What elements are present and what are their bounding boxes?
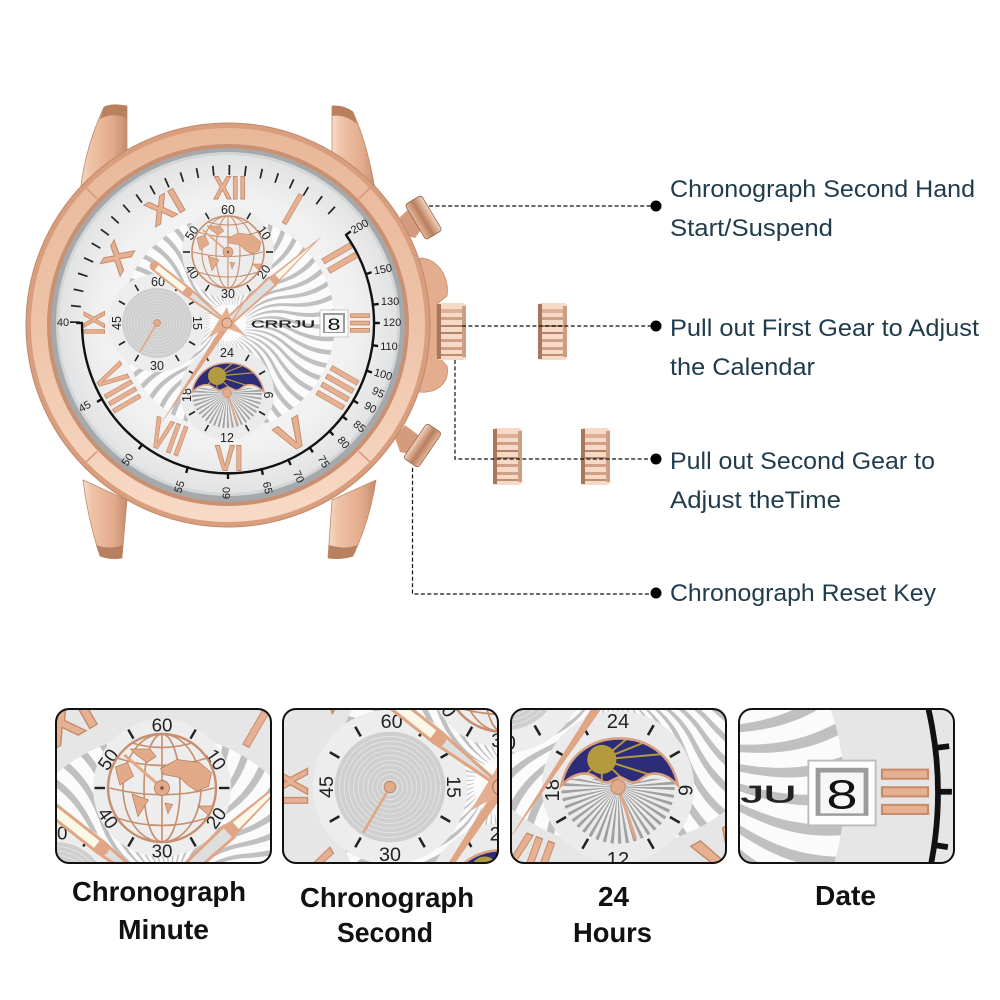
case bezel <box>26 123 430 527</box>
roman numerals: V <box>267 407 317 463</box>
caption: chronograph minute: Minute <box>118 914 209 945</box>
tachymeter scale numbers: 75 <box>315 454 331 470</box>
centre hub <box>208 307 248 338</box>
subdial: 24 hours with moon phase: 12 <box>220 431 234 445</box>
subdial: chronograph second <box>108 274 206 373</box>
callout: chronograph second hand start/suspend: Chronograph Second Hand <box>670 176 975 203</box>
roman numerals: VI <box>215 438 243 478</box>
subdial: chronograph minute <box>182 203 274 301</box>
date window <box>320 310 348 337</box>
tachymeter scale numbers: 70 <box>290 469 306 485</box>
globe <box>192 216 264 288</box>
guilloche wave disc <box>97 192 359 454</box>
tachymeter scale numbers: 40 <box>57 317 69 329</box>
moon phase window <box>190 360 266 394</box>
subdial: chronograph minute: 60 <box>221 203 235 217</box>
callout: pull out second gear: Pull out Second Gear to <box>670 448 935 475</box>
subdial: chronograph second: 15 <box>190 316 204 330</box>
tachymeter scale numbers: 45 <box>77 399 93 415</box>
tachymeter scale numbers: 80 <box>334 434 352 452</box>
subdial: 24 hours with moon phase: 24 <box>220 346 234 360</box>
minute track ticks <box>75 170 342 323</box>
caption: chronograph minute: Chronograph <box>72 876 246 907</box>
watch dial <box>57 170 401 499</box>
tachymeter scale numbers: 60 <box>221 487 233 499</box>
tachymeter arc and ticks <box>76 231 380 479</box>
tachymeter scale numbers: 65 <box>260 481 274 495</box>
subdial: chronograph minute: 30 <box>221 287 235 301</box>
tachymeter scale numbers: 90 <box>362 400 378 416</box>
callout: chronograph second hand start/suspend <box>429 176 975 242</box>
caption: 24 hours <box>573 881 652 948</box>
callout: chronograph reset key: Chronograph Reset Key <box>670 580 937 607</box>
tachymeter scale numbers: 95 <box>370 385 386 401</box>
roman numerals: II <box>312 235 368 281</box>
roman numerals: XII <box>214 170 246 206</box>
roman numerals: X <box>94 235 142 280</box>
roman numerals: III <box>344 312 376 334</box>
roman numerals: VII <box>143 408 193 466</box>
panel: chronograph second <box>283 709 498 863</box>
roman numerals: XI <box>139 180 191 234</box>
subdial: chronograph minute: 20 <box>254 262 274 282</box>
tachymeter scale numbers: 55 <box>172 479 188 495</box>
tachymeter scale numbers: 100 <box>373 367 393 383</box>
minute hand <box>225 236 322 326</box>
callout: chronograph second hand start/suspend: Start/Suspend <box>670 215 833 242</box>
subdial: chronograph minute: 10 <box>254 223 274 243</box>
caption: chronograph second: Second <box>337 917 433 948</box>
subdial: chronograph minute: 50 <box>182 223 202 243</box>
callout: pull out second gear <box>455 360 935 514</box>
crown <box>437 303 466 360</box>
panel: date <box>739 709 954 863</box>
callout: pull out second gear: Adjust theTime <box>670 487 841 514</box>
subdial: 24 hours with moon phase: 18 <box>180 388 194 402</box>
caption: 24 hours: 24 <box>598 881 629 912</box>
tachymeter scale numbers: 150 <box>373 262 393 278</box>
subdial: chronograph second: 60 <box>151 275 165 289</box>
panel: chronograph minute <box>56 709 271 863</box>
tachymeter scale numbers: 200 <box>349 217 371 237</box>
caption: chronograph second: Chronograph <box>300 882 474 913</box>
seconds hand <box>158 290 252 428</box>
top pusher <box>400 195 442 240</box>
tachymeter scale numbers: 120 <box>383 317 401 329</box>
crown guards <box>418 258 447 392</box>
crown second gear, first copy <box>493 428 522 485</box>
roman numerals: VIII <box>85 356 149 420</box>
caption: 24 hours: Hours <box>573 917 652 948</box>
roman numerals: I <box>275 185 309 235</box>
tachymeter scale numbers: 50 <box>120 452 136 468</box>
tachymeter scale numbers: 110 <box>380 341 398 353</box>
crown first gear position <box>538 303 567 360</box>
callout: pull out first gear <box>462 315 979 381</box>
roman numerals: IX <box>78 311 112 335</box>
bottom pusher <box>395 423 442 468</box>
caption: chronograph minute <box>72 876 246 945</box>
watch lugs <box>80 105 376 559</box>
subdial: 24 hours with moon phase <box>180 346 275 445</box>
hour hand <box>155 266 222 319</box>
caption: chronograph second <box>300 882 474 948</box>
brand logo: CRRJU <box>251 320 315 330</box>
watch illustration <box>26 105 466 559</box>
tachymeter scale numbers: 85 <box>350 418 368 436</box>
roman numerals: IIII <box>307 359 369 417</box>
tachymeter scale numbers: 130 <box>381 296 399 308</box>
callout: pull out first gear: the Calendar <box>670 354 815 381</box>
roman numerals <box>78 170 376 478</box>
subdial: 24 hours with moon phase: 6 <box>261 392 275 399</box>
panel: 24 hours <box>511 709 726 863</box>
tachymeter scale numbers <box>57 217 401 499</box>
crown second gear, second copy <box>581 428 610 485</box>
subdial: chronograph second: 30 <box>150 359 164 373</box>
subdial: chronograph second: 45 <box>110 316 124 330</box>
callout: pull out first gear: Pull out First Gear to Adjust <box>670 315 979 342</box>
subdial: chronograph minute: 40 <box>182 262 202 282</box>
callout: chronograph reset key <box>412 468 937 607</box>
date window: 8 <box>328 315 340 334</box>
caption: date: Date <box>815 880 876 911</box>
